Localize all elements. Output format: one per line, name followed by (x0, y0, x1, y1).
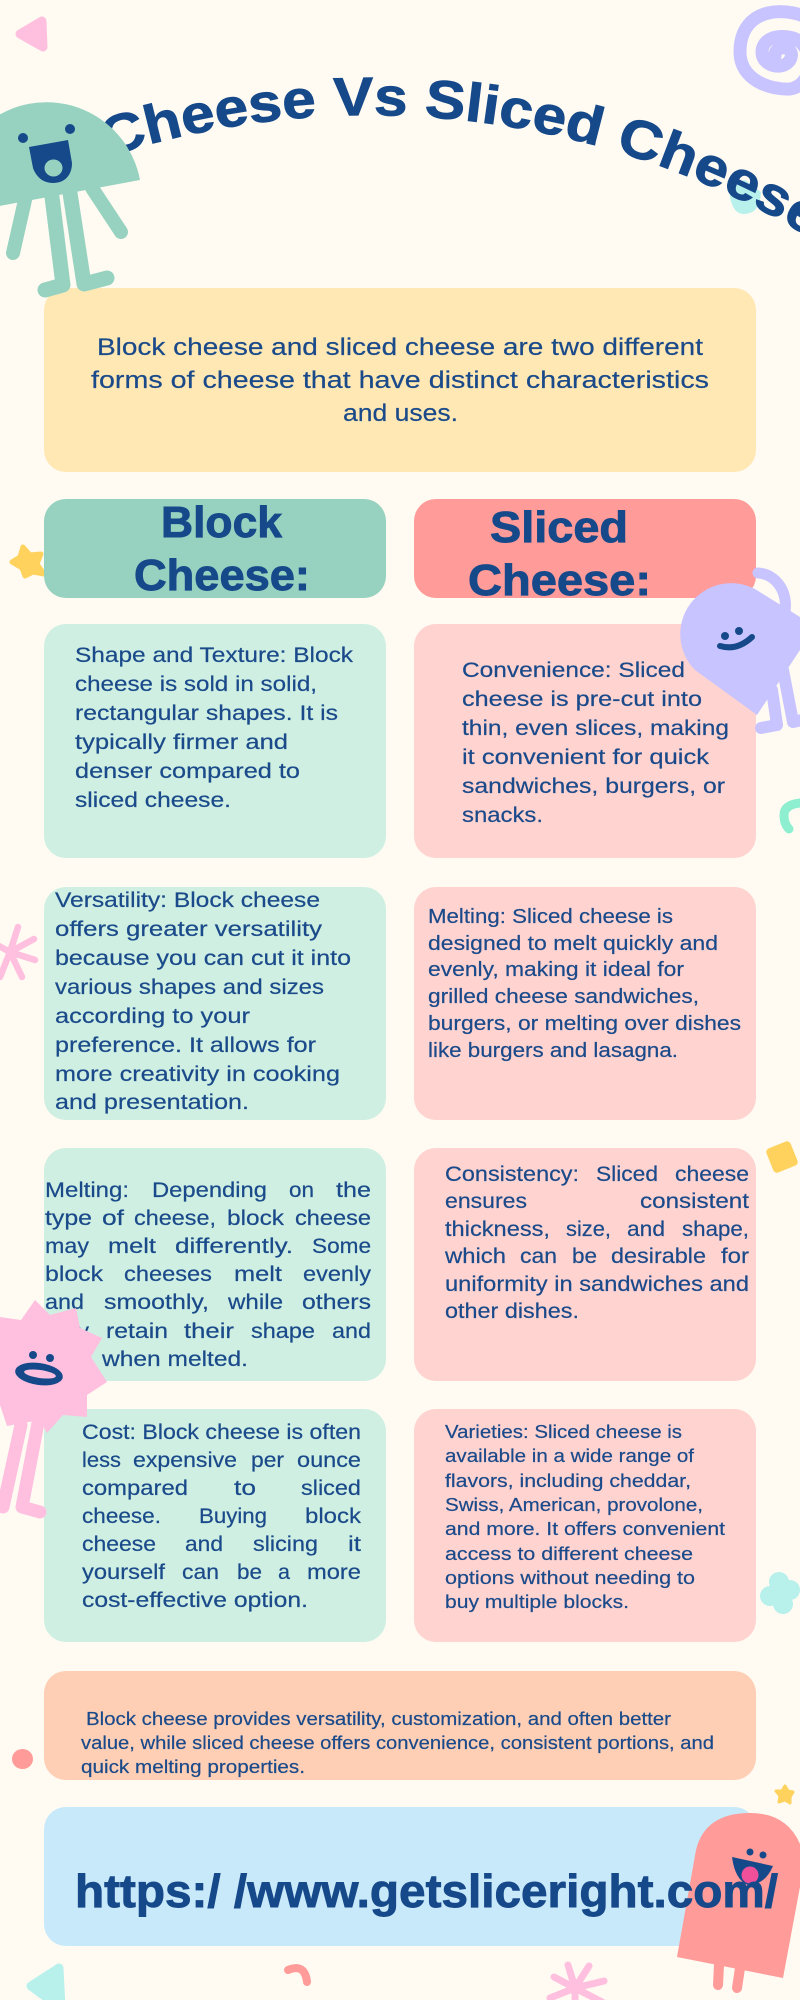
card: block melting: and (332, 1320, 371, 1343)
card: cost: cheese. (82, 1505, 161, 1528)
card: convenience: Convenience: Sliced (462, 659, 685, 682)
panel: intro: Block cheese and sliced cheese are two different (97, 334, 703, 361)
heading: sliced cheese: Cheese: (468, 556, 651, 605)
panel: summary: value, while sliced cheese offers convenience, consistent portions, and (81, 1733, 714, 1753)
card: cost: a (278, 1561, 290, 1584)
card: sliced melting: Melting: Sliced cheese is (428, 906, 673, 928)
card: varieties: access to different cheese (445, 1543, 693, 1564)
card: cost: yourself (82, 1561, 165, 1584)
card: block melting: of (102, 1207, 124, 1230)
card: consistency: thickness, (445, 1218, 550, 1241)
card: block melting: cheese (295, 1207, 371, 1230)
card: consistency: for (721, 1245, 749, 1268)
card: convenience: snacks. (462, 804, 543, 827)
card: consistency: Consistency: (445, 1163, 579, 1186)
panel: summary: quick melting properties. (81, 1757, 305, 1777)
panel: intro: and uses. (343, 400, 458, 427)
card: block melting: melt (234, 1263, 282, 1286)
card: varieties: buy multiple blocks. (445, 1591, 629, 1612)
icon: salmon dot (12, 1749, 33, 1769)
icon: yellow square (765, 1140, 799, 1174)
card: block melting: Melting: (45, 1179, 129, 1202)
card: cost: it (348, 1533, 361, 1556)
card: varieties: Varieties: Sliced cheese is (445, 1421, 682, 1442)
heading: block cheese: Cheese: (134, 551, 310, 600)
card: versatility: preference. It allows for (55, 1034, 316, 1057)
card: varieties: and more. It offers convenient (445, 1518, 725, 1539)
card: varieties: options without needing to (445, 1567, 695, 1588)
card: cost: ounce (297, 1449, 361, 1472)
panel: intro: forms of cheese that have distinct characteristics (91, 367, 709, 394)
card: block melting: the (336, 1179, 371, 1202)
card: block melting: Some (312, 1235, 371, 1258)
card: consistency: which (444, 1245, 506, 1268)
icon: cyan triangle (31, 1968, 61, 2000)
icon: lilac spiral (740, 12, 800, 89)
card: cost: block (305, 1505, 362, 1528)
card: block melting: evenly (303, 1263, 372, 1286)
card: cost: Cost: Block cheese is often (82, 1421, 361, 1444)
icon: pink asterisk bottom (550, 1965, 604, 2000)
card: shape and texture: cheese is sold in solid, (75, 673, 317, 696)
card: cost: Buying (199, 1505, 267, 1528)
character: lilac heart (680, 573, 800, 728)
card: cost: cost-effective option. (82, 1589, 308, 1612)
card: block melting: shape (251, 1320, 315, 1343)
card: convenience (414, 624, 756, 858)
heading: block cheese: Block (161, 498, 283, 547)
card: consistency: other dishes. (445, 1300, 579, 1323)
card: cost: cheese (82, 1533, 156, 1556)
card: cost (44, 1409, 386, 1642)
card: shape and texture: rectangular shapes. It is (75, 702, 338, 725)
card: sliced melting: evenly, making it ideal for (428, 959, 684, 981)
card: shape and texture (44, 624, 386, 858)
card: versatility: more creativity in cooking (55, 1063, 340, 1086)
card: cost: to (234, 1477, 256, 1500)
card: versatility (44, 887, 386, 1120)
card: cost: slicing (253, 1533, 318, 1556)
card: block melting: when melted. (101, 1348, 248, 1371)
card: shape and texture: sliced cheese. (75, 789, 231, 812)
icon: pink triangle (20, 21, 43, 47)
card: block melting: cheese, (134, 1207, 216, 1230)
card: block melting: may (45, 1235, 90, 1258)
card: consistency: can (520, 1245, 557, 1268)
card: cost: can (182, 1561, 219, 1584)
card: consistency: ensures (445, 1190, 527, 1213)
card: block melting: smoothly, (104, 1291, 209, 1314)
card: sliced melting: grilled cheese sandwiches, (428, 986, 699, 1008)
card: shape and texture: Shape and Texture: Block (75, 644, 354, 667)
card: block melting: melt (108, 1235, 156, 1258)
card: versatility: and presentation. (55, 1091, 249, 1114)
card: shape and texture: denser compared to (75, 760, 300, 783)
character: jellyfish (0, 102, 140, 290)
card: consistency: and (627, 1218, 665, 1241)
icon: green arc (784, 803, 800, 829)
card: consistency: uniformity in sandwiches and (445, 1273, 749, 1296)
card: block melting: Depending (152, 1179, 267, 1202)
card: block melting: block (227, 1207, 285, 1230)
card: versatility: offers greater versatility (55, 918, 323, 941)
card: varieties: flavors, including cheddar, (445, 1470, 691, 1491)
card: convenience: it convenient for quick (462, 746, 710, 769)
card: sliced melting: like burgers and lasagna. (428, 1040, 678, 1062)
icon: yellow star (12, 547, 44, 576)
card: versatility: because you can cut it into (55, 947, 351, 970)
card: block melting: their (184, 1320, 234, 1343)
character: pink spiky (0, 1300, 107, 1512)
card: cost: sliced (301, 1477, 361, 1500)
card: block melting: and (45, 1291, 84, 1314)
card: block melting: others (302, 1291, 371, 1314)
card: sliced melting (414, 887, 756, 1120)
card: cost: less (82, 1449, 121, 1472)
card: sliced melting: burgers, or melting over dishes (428, 1013, 741, 1035)
card: cost: compared (82, 1477, 188, 1500)
icon: coral arc (288, 1968, 307, 1982)
heading: sliced cheese (414, 499, 756, 605)
card: cost: expensive (133, 1449, 237, 1472)
card: varieties: available in a wide range of (445, 1445, 695, 1466)
card: consistency: shape, (682, 1218, 749, 1241)
card: consistency: size, (566, 1218, 611, 1241)
card: consistency: desirable (611, 1245, 706, 1268)
icon: cyan blob (729, 180, 761, 214)
card: block melting: retain (106, 1320, 168, 1343)
card: shape and texture: typically firmer and (75, 731, 288, 754)
heading: block cheese (44, 498, 386, 600)
icon: pink asterisk left (0, 927, 35, 977)
card: block melting: on (289, 1179, 314, 1202)
card: sliced melting: designed to melt quickly and (428, 933, 718, 955)
card: varieties (414, 1409, 756, 1642)
card: block melting (44, 1148, 386, 1381)
card: cost: per (251, 1449, 284, 1472)
card: consistency: be (572, 1245, 597, 1268)
card: versatility: according to your (55, 1005, 250, 1028)
card: block melting: may (45, 1320, 90, 1343)
card: varieties: Swiss, American, provolone, (445, 1494, 703, 1515)
card: consistency (414, 1148, 756, 1381)
card: block melting: while (227, 1291, 283, 1314)
icon: small yellow star (776, 1786, 793, 1803)
panel: intro (44, 288, 756, 472)
panel: summary: Block cheese provides versatility, customization, and often better (86, 1709, 671, 1729)
panel: url background (44, 1807, 756, 1946)
card: versatility: various shapes and sizes (55, 976, 324, 999)
card: consistency: consistent (640, 1190, 749, 1213)
card: convenience: cheese is pre-cut into (462, 688, 702, 711)
card: convenience: thin, even slices, making (462, 717, 729, 740)
icon: cyan clover (760, 1572, 800, 1614)
card: consistency: Sliced (596, 1163, 658, 1186)
card: cost: be (237, 1561, 262, 1584)
card: convenience: sandwiches, burgers, or (462, 775, 725, 798)
card: versatility: Versatility: Block cheese (55, 889, 320, 912)
character: coral popsicle (677, 1813, 800, 1988)
card: block melting: block (45, 1263, 104, 1286)
card: block melting: cheeses (124, 1263, 212, 1286)
card: cost: and (185, 1533, 223, 1556)
card: block melting: differently. (175, 1235, 293, 1258)
card: consistency: cheese (675, 1163, 749, 1186)
card: block melting: type (45, 1207, 92, 1230)
url link text: https:/ /www.getsliceright.com/ (75, 1865, 778, 1917)
panel: summary (44, 1671, 756, 1780)
heading: sliced cheese: Sliced (490, 503, 628, 552)
card: cost: more (307, 1561, 361, 1584)
